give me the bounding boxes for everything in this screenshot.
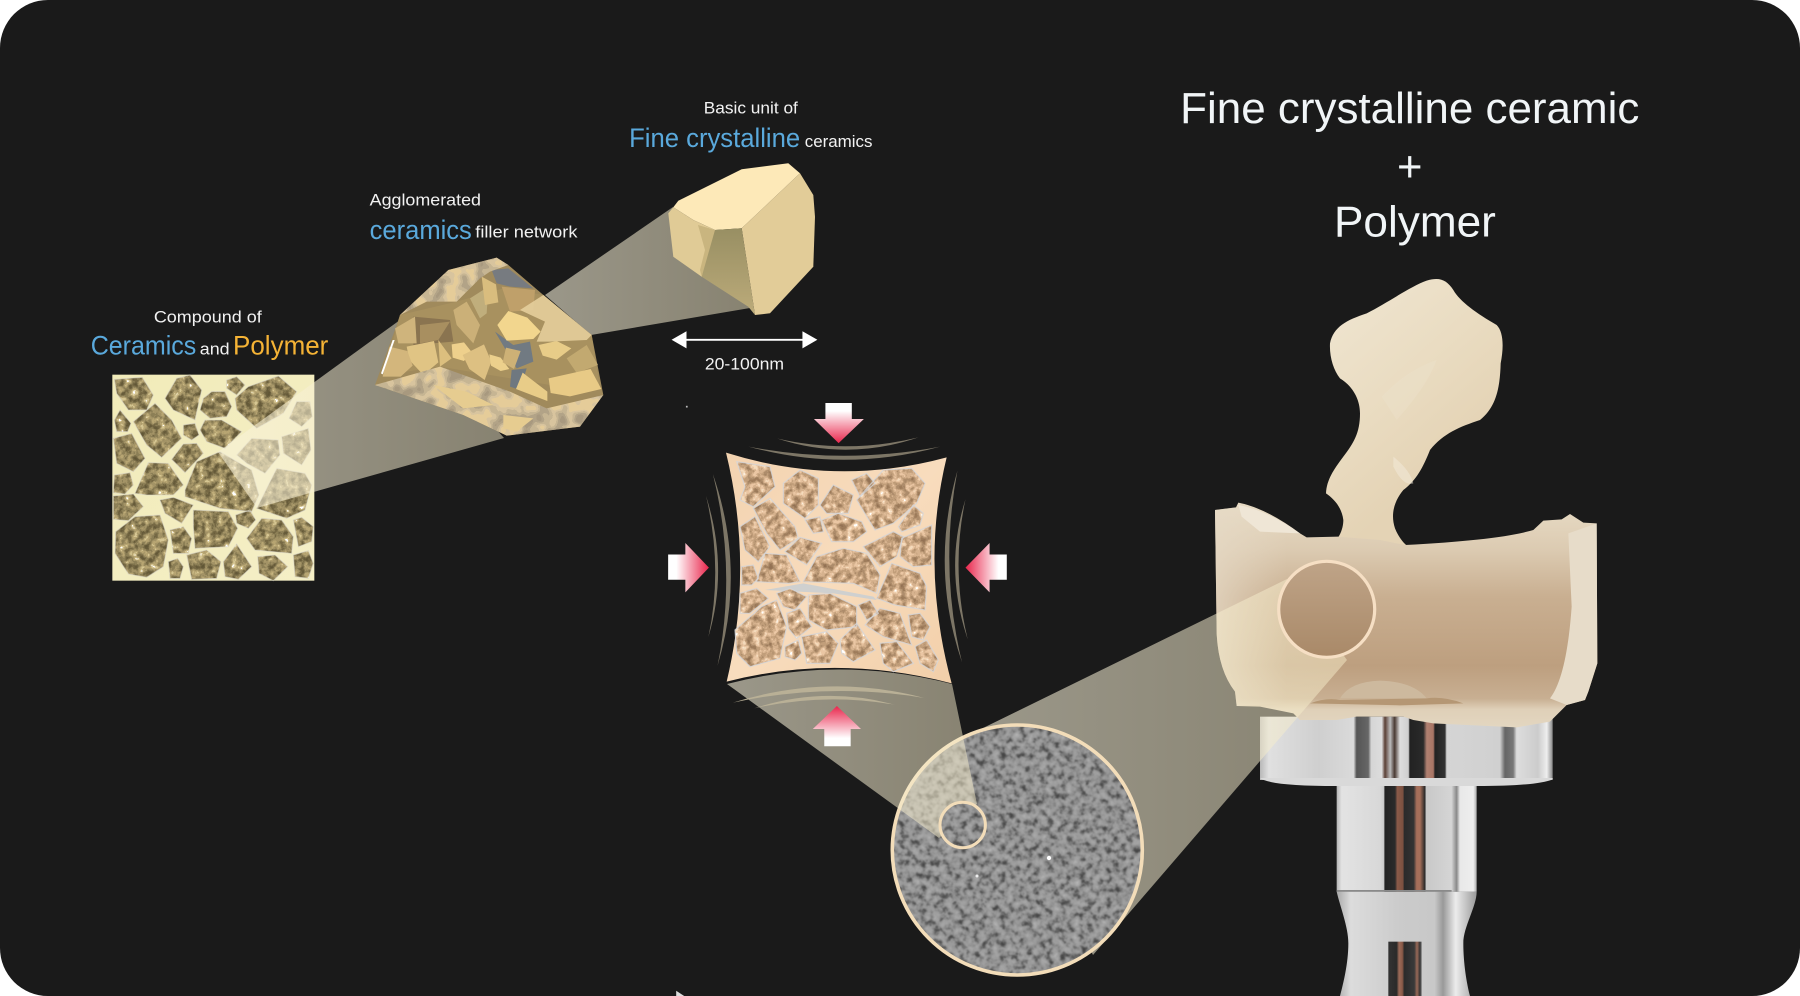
label: agglomerated ceramics filler network: filler network	[475, 223, 578, 242]
icon: metal shaft and flange	[1260, 717, 1553, 996]
label: basic unit of fine crystalline ceramics	[629, 99, 872, 153]
dimension arrow: 20-100nm	[672, 331, 817, 374]
zoom cone: tool to SEM circle	[981, 579, 1347, 955]
panel: compound of ceramics and polymer square	[112, 375, 314, 581]
panel: compressed composite square	[726, 453, 952, 683]
label: agglomerated ceramics filler network: ceramics	[370, 215, 472, 245]
label: agglomerated ceramics filler network: Agglomerated	[370, 190, 481, 209]
title: Polymer	[1334, 198, 1496, 246]
zoom cone: square to filler network	[218, 320, 504, 508]
pressure arcs: bottom	[733, 686, 924, 708]
tiny specks	[676, 406, 688, 996]
panel: tooth restoration sample on metal mandrel	[1215, 279, 1597, 996]
zoom cone: compressed square to SEM detail	[727, 670, 977, 838]
label: basic unit of fine crystalline ceramics: Fine crystalline	[629, 123, 800, 153]
arrow: right press	[965, 543, 1007, 592]
dimension arrow: 20-100nm: 20-100nm	[705, 355, 784, 374]
small inner SEM ring	[940, 802, 985, 848]
arrow: left press	[668, 543, 709, 592]
magnifier ring on tool	[1279, 561, 1375, 657]
panel: agglomerated filler network particle	[375, 258, 603, 436]
label: compound of ceramics and polymer: Compound of	[154, 308, 262, 327]
icon: ceramic block	[1215, 503, 1597, 727]
title	[1180, 85, 1639, 246]
title: Fine crystalline ceramic	[1180, 85, 1639, 133]
label: compound of ceramics and polymer: Ceramics	[91, 331, 196, 361]
panel: SEM microscopy circle	[892, 725, 1142, 975]
panel: basic unit crystal	[668, 163, 815, 315]
label: agglomerated ceramics filler network	[370, 190, 578, 245]
label: basic unit of fine crystalline ceramics: ceramics	[805, 132, 872, 151]
icon: tooth sprue	[1326, 279, 1503, 547]
label: compound of ceramics and polymer: and	[200, 340, 230, 359]
pressure arcs: top, left and right	[706, 437, 968, 666]
zoom cone: filler network to crystal	[545, 207, 750, 335]
arrow: top press	[814, 403, 864, 443]
label: compound of ceramics and polymer	[91, 308, 329, 361]
label: compound of ceramics and polymer: Polymer	[233, 331, 329, 361]
arrow: bottom press	[813, 706, 861, 746]
title: +	[1397, 143, 1422, 191]
label: basic unit of fine crystalline ceramics: Basic unit of	[704, 99, 798, 118]
